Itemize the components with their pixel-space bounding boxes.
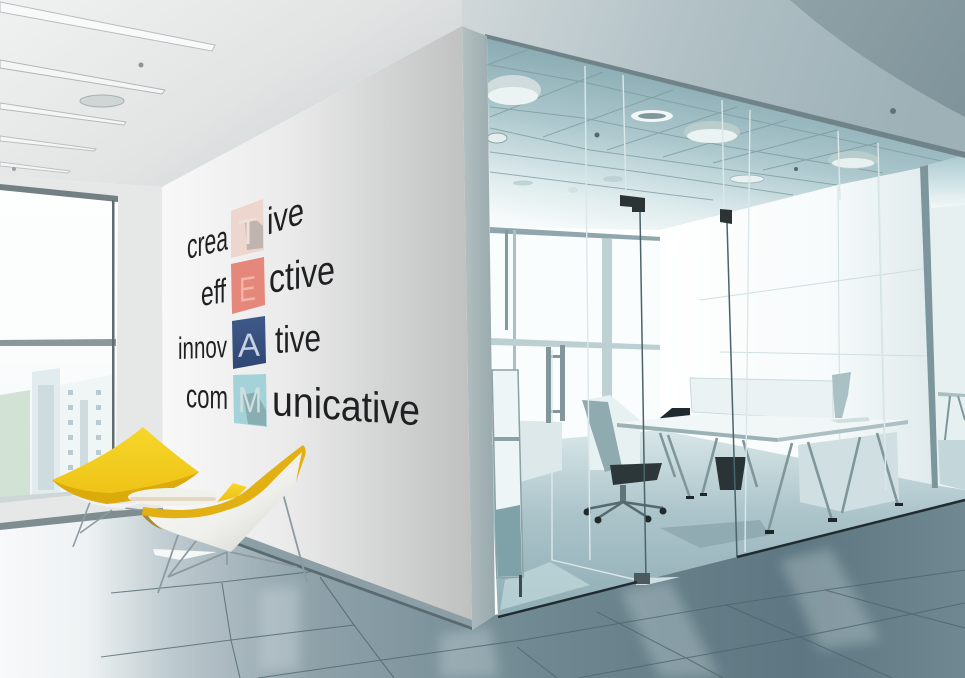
left yellow chair: [52, 427, 199, 547]
glass room interior: [485, 34, 965, 617]
door handle: [546, 345, 565, 423]
square A: [232, 316, 266, 369]
wall: [162, 26, 472, 630]
square E: E: [239, 269, 256, 309]
back window: [490, 227, 662, 445]
waste bin: [715, 457, 746, 490]
glass top rail: [485, 34, 965, 158]
glass door edges: [552, 66, 886, 580]
row: effective: [201, 247, 335, 314]
row: communicative: unicative: [272, 377, 420, 435]
right ceiling and bulkhead: [462, 0, 965, 165]
square M: M: [238, 380, 262, 421]
interior ceiling: [485, 36, 965, 230]
row: innovative: tive: [275, 318, 321, 362]
row: effective: ctive: [269, 247, 335, 302]
telephone: [660, 408, 690, 422]
ceiling lights: [485, 75, 878, 193]
interior floor: [490, 430, 965, 617]
wall baseboard: [225, 529, 472, 630]
left glass side panel: [492, 370, 523, 597]
left side wall: [0, 176, 163, 530]
square T: T: [238, 211, 258, 255]
left ceiling: [0, 0, 470, 187]
office chair: [582, 400, 666, 524]
partition screen: [690, 378, 833, 420]
round table: [128, 488, 218, 560]
square A: A: [238, 325, 260, 364]
far chair back: [832, 372, 851, 418]
main desk: [617, 414, 908, 534]
far cabinets: [502, 395, 640, 482]
back wall panels: [660, 167, 935, 490]
floor: [0, 495, 965, 678]
right white and yellow chair: [142, 445, 307, 593]
row: creative: crea: [187, 218, 228, 267]
row: communicative: com: [186, 377, 228, 416]
door hinges: [620, 195, 732, 224]
glass door pillars: [640, 212, 737, 582]
next room to the right: [920, 155, 965, 490]
wall logo: TEAM: [178, 190, 420, 435]
row: innovative: [178, 316, 321, 369]
floor thresholds: [498, 500, 965, 617]
row: innovative: innov: [178, 329, 227, 366]
row: communicative: [186, 374, 420, 435]
square M: [233, 374, 267, 427]
row: creative: [187, 190, 304, 267]
row: effective: eff: [201, 272, 226, 314]
glass wall column: [462, 26, 495, 630]
left window with city view: [0, 184, 122, 503]
row: creative: ive: [267, 190, 304, 244]
